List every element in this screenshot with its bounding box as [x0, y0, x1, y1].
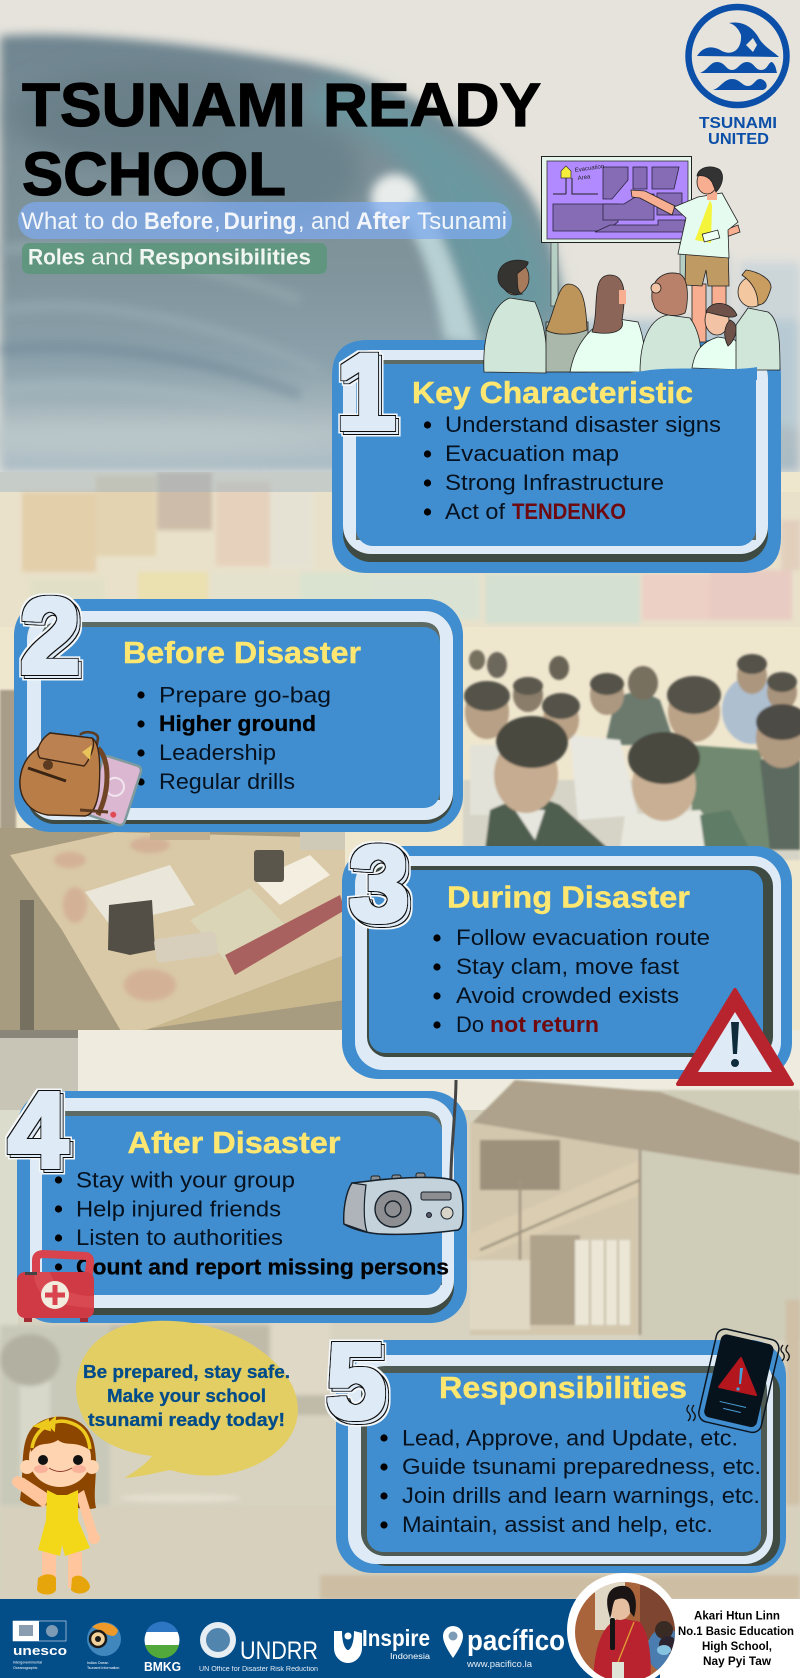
author credit: Nay Pyi Taw	[703, 1656, 771, 1668]
author credit: High School,	[702, 1641, 772, 1653]
ruined building	[467, 1080, 800, 1340]
student with ponytail	[692, 303, 745, 370]
icon: warning triangle	[678, 990, 792, 1084]
number 5: 5	[326, 1320, 386, 1441]
logo: pacifico: www.pacifico.la	[466, 1659, 532, 1669]
bullet list: Lead, Approve, and Update, etc.	[402, 1426, 738, 1450]
bullet list: Strong Infrastructure	[445, 470, 664, 495]
background: wave photo	[0, 0, 800, 492]
footer bar	[0, 1573, 800, 1678]
logo: pacifico	[443, 1625, 565, 1669]
icon: phone alert	[687, 1327, 789, 1434]
heading: During Disaster	[447, 880, 690, 914]
logo: Inspire Indonesia	[334, 1625, 431, 1663]
number 2: 2	[20, 575, 80, 696]
logo: UNDRR	[199, 1622, 318, 1673]
evacuation map board: Area	[577, 174, 591, 182]
author credit	[678, 1610, 794, 1668]
number 4: 4	[8, 1069, 68, 1190]
student with short blond hair	[736, 270, 780, 370]
logo: BMKG	[144, 1622, 181, 1674]
bullet list	[380, 1426, 761, 1537]
number 1: 1	[336, 331, 396, 452]
logo text: TSUNAMI	[699, 115, 777, 132]
bullet list: Join drills and learn warnings, etc.	[402, 1483, 760, 1508]
subtitle pill: Tsunami	[417, 208, 507, 235]
bullet list: Regular drills	[159, 769, 295, 794]
bullet list: TENDENKO	[512, 499, 626, 524]
logo: Inspire Indonesia: Indonesia	[390, 1652, 431, 1661]
subtitle pill: ,	[214, 208, 221, 235]
logo: Inspire Indonesia: Inspire	[362, 1625, 430, 1651]
panel 5: responsibilities	[336, 1340, 786, 1573]
bullet list	[55, 1168, 449, 1280]
logo: BMKG: BMKG	[144, 1660, 181, 1674]
bullet list: Follow evacuation route	[456, 925, 710, 950]
bullet list: not return	[490, 1012, 599, 1037]
author credit: Akari Htun Linn	[694, 1610, 780, 1622]
bullet list: Stay with your group	[76, 1168, 295, 1192]
callout: speech bubble: Make your school	[107, 1386, 266, 1406]
heading: After Disaster	[128, 1125, 340, 1160]
callout: speech bubble	[76, 1321, 298, 1478]
bullet list: Stay clam, move fast	[456, 954, 680, 979]
student with blond hair	[546, 284, 588, 372]
roles pill	[22, 243, 327, 274]
bullet list: Guide tsunami preparedness, etc.	[402, 1454, 761, 1479]
background: desk with books	[0, 828, 345, 1038]
bullet list: Do	[456, 1012, 484, 1037]
bullet list: Act of	[445, 499, 506, 524]
panel 2: before disaster	[14, 599, 463, 832]
icon: first aid kit	[17, 1254, 94, 1322]
heading: Before Disaster	[123, 635, 361, 670]
student with beard	[484, 260, 547, 373]
logo: Tsunami United	[688, 7, 786, 148]
logo: UNDRR: UNDRR	[240, 1637, 318, 1665]
portrait photo	[567, 1573, 683, 1678]
illustration: girl	[12, 1417, 100, 1594]
panel 3: during disaster	[342, 846, 792, 1079]
logo: unesco	[13, 1621, 67, 1670]
logo: UNDRR: UN Office for Disaster Risk Reduction	[199, 1666, 318, 1673]
logo: Indian Ocean Tsunami Information	[87, 1622, 121, 1670]
logo: Indian Ocean Tsunami Information: Indian Ocean	[87, 1661, 108, 1665]
panel 1: key characteristic	[332, 340, 781, 573]
title	[22, 71, 541, 208]
logo: unesco: Oceanographic	[13, 1666, 38, 1670]
title: SCHOOL	[22, 140, 286, 208]
panel 4: after disaster	[17, 1091, 467, 1323]
bullet list: Prepare go-bag	[159, 682, 331, 708]
background: students	[0, 650, 800, 860]
subtitle pill: What to do	[21, 208, 138, 235]
heading: Responsibilities	[439, 1370, 687, 1405]
roles pill: Responsibilities	[139, 244, 311, 270]
bullet list: Listen to authorities	[76, 1225, 283, 1250]
logo: unesco: unesco	[13, 1644, 67, 1658]
bullet list: Evacuation map	[445, 441, 619, 466]
student with glasses	[640, 273, 701, 372]
logo: pacifico: pacífico	[467, 1625, 565, 1657]
bullet list: Help injured friends	[76, 1196, 281, 1222]
number 3: 3	[349, 823, 409, 944]
background: ruined building photo	[0, 1030, 800, 1600]
bullet list: Maintain, assist and help, etc.	[402, 1512, 713, 1537]
bullet list	[137, 682, 331, 794]
bullet list: Higher ground	[159, 711, 316, 736]
bullet list	[424, 412, 721, 524]
student with brown hair	[570, 275, 645, 372]
roles pill: and	[91, 244, 133, 270]
panel 1 text	[412, 375, 721, 524]
illustration: teacher with evacuation map and students	[480, 156, 780, 380]
callout: speech bubble: Be prepared, stay safe.	[83, 1362, 290, 1382]
logo: Tsunami United: UNITED	[708, 131, 769, 148]
background: classroom photo	[0, 472, 800, 1038]
subtitle pill: During	[224, 208, 296, 235]
bullet list: Understand disaster signs	[445, 412, 721, 437]
bullet list: Leadership	[159, 740, 276, 765]
bullet list	[433, 925, 710, 1037]
bullet list: Count and report missing persons	[76, 1254, 449, 1280]
evacuation map board	[542, 156, 692, 306]
logo ring	[688, 7, 786, 105]
subtitle pill: Before	[144, 208, 213, 235]
front row	[484, 800, 608, 846]
bullet list: Avoid crowded exists	[456, 983, 679, 1008]
subtitle pill: , and	[298, 208, 350, 235]
icon: radio	[344, 1080, 463, 1234]
middle row	[470, 745, 506, 815]
title: TSUNAMI READY	[22, 71, 541, 139]
logo: Indian Ocean Tsunami Information: Tsunami Information	[87, 1666, 119, 1670]
evacuation map board: Evacuation	[574, 164, 605, 174]
back row	[469, 650, 485, 670]
heading: Key Characteristic	[412, 375, 693, 410]
subtitle pill: After	[356, 208, 410, 235]
callout: speech bubble: tsunami ready today!	[88, 1410, 285, 1430]
logo: unesco: Intergovernmental	[13, 1660, 42, 1664]
phone	[85, 755, 142, 826]
subtitle pill	[18, 202, 512, 239]
author credit: No.1 Basic Education	[678, 1626, 794, 1638]
roles pill: Roles	[28, 244, 85, 270]
teacher	[631, 167, 740, 342]
icon: backpack and phone	[20, 732, 142, 826]
